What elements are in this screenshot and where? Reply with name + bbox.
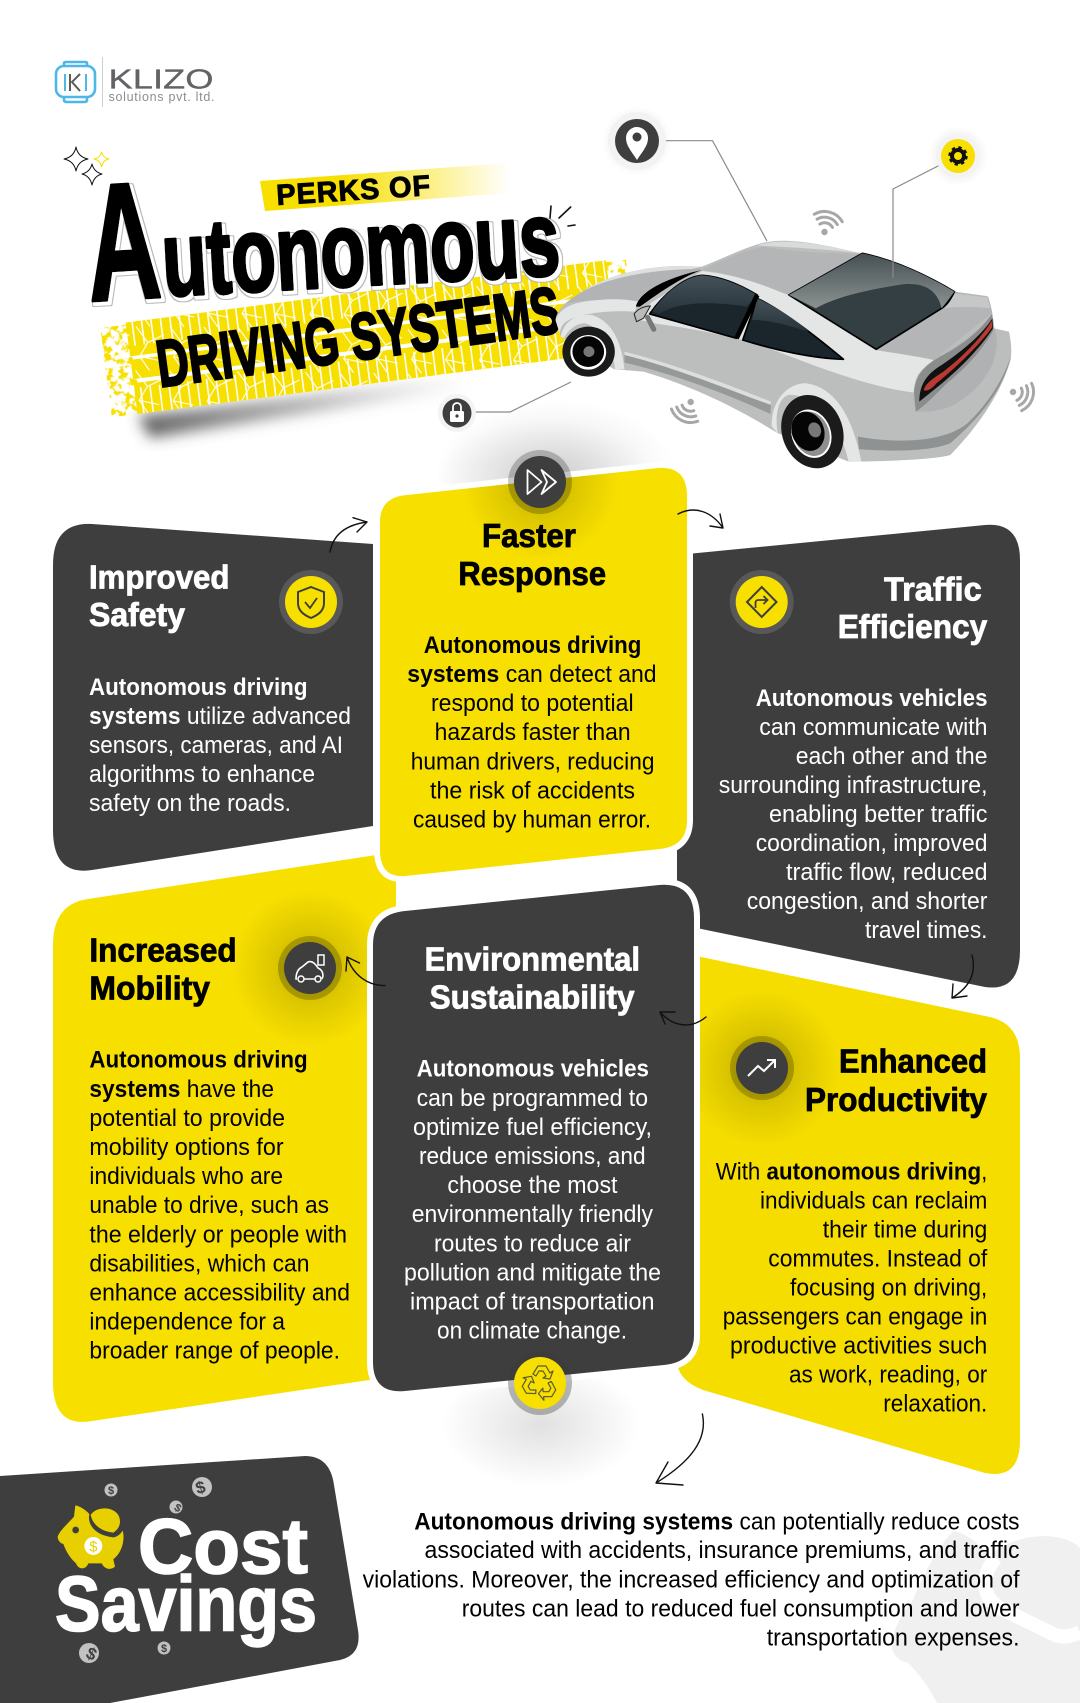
- body text: systems utilize advanced: [89, 703, 351, 730]
- arrow: productivity to environmental: [660, 1012, 706, 1025]
- body text: impact of transportation: [410, 1288, 654, 1316]
- car body: [556, 241, 1011, 462]
- body text: human drivers, reducing: [411, 748, 654, 775]
- heading: Efficiency: [838, 608, 988, 645]
- body text: hazards faster than: [435, 719, 631, 746]
- wifi signal: rear: [1005, 377, 1037, 413]
- body text: Autonomous vehicles: [417, 1056, 649, 1083]
- body text: routes to reduce air: [434, 1230, 631, 1257]
- callout: settings gear: [893, 126, 988, 278]
- body text: Autonomous driving: [89, 1047, 308, 1074]
- wing mirror: [634, 270, 702, 329]
- logo divider: [102, 57, 103, 107]
- background pig watermark: [892, 1531, 1080, 1703]
- body text: systems can detect and: [407, 661, 657, 688]
- body text: [89, 1047, 350, 1365]
- track shadow: [138, 376, 470, 438]
- heading: [89, 931, 237, 1007]
- heading: Traffic: [884, 570, 982, 608]
- ribbon label: PERKS OF: [275, 170, 431, 212]
- body text: optimize fuel efficiency,: [413, 1114, 652, 1141]
- heading: [55, 1502, 317, 1648]
- body text: the elderly or people with: [89, 1221, 347, 1248]
- body text: systems have the: [89, 1076, 274, 1103]
- body text: coordination, improved: [756, 830, 988, 857]
- panel: traffic efficiency: [677, 525, 1020, 988]
- body text: commutes. Instead of: [768, 1245, 987, 1272]
- body text: Autonomous driving: [424, 632, 641, 659]
- panel background: [380, 468, 687, 876]
- icon: road sign: [730, 570, 794, 634]
- emphasis burst: [550, 206, 575, 226]
- rear wheel: [772, 387, 853, 476]
- cost savings text: associated with accidents, insurance premiums, and traffic: [424, 1537, 1020, 1564]
- body text: respond to potential: [431, 690, 634, 717]
- icon shadow below panel: [441, 1363, 641, 1487]
- body text: Autonomous driving: [89, 674, 308, 701]
- body text: travel times.: [865, 917, 988, 944]
- logo wordmark: KLIZO: [108, 63, 214, 94]
- logo: [56, 57, 214, 107]
- track texture: [100, 258, 637, 417]
- logo icon: [56, 62, 95, 102]
- arrow: traffic to productivity: [952, 955, 973, 998]
- body text: Autonomous vehicles: [756, 685, 988, 712]
- arrow: response to traffic: [678, 510, 723, 528]
- icon: fast forward: [476, 450, 604, 546]
- title line: autonomous: A: [81, 148, 165, 337]
- heading: Safety: [89, 596, 186, 633]
- coins: $: [194, 1477, 208, 1498]
- body text: congestion, and shorter: [747, 888, 988, 915]
- heading: Improved: [89, 559, 230, 596]
- body text: independence for a: [89, 1309, 285, 1336]
- body text: individuals can reclaim: [760, 1187, 987, 1214]
- cost savings text: Autonomous driving systems can potentially reduce costs: [414, 1508, 1020, 1535]
- body text: broader range of people.: [89, 1338, 340, 1365]
- body text: [89, 674, 351, 817]
- cost savings text: transportation expenses.: [767, 1625, 1020, 1652]
- body text: reduce emissions, and: [419, 1143, 646, 1170]
- body text: choose the most: [447, 1172, 618, 1199]
- body text: productive activities such: [730, 1332, 987, 1359]
- panel: improved safety: [53, 524, 373, 871]
- body text: [719, 685, 988, 944]
- heading: [838, 570, 988, 645]
- ribbon: perks of: [260, 163, 510, 212]
- body text: individuals who are: [89, 1163, 283, 1190]
- heading: [805, 1043, 988, 1118]
- body text: pollution and mitigate the: [404, 1259, 661, 1286]
- soft shadow below the car: [435, 400, 675, 540]
- panel: environmental sustainability: [373, 885, 694, 1487]
- heading: Productivity: [805, 1081, 988, 1118]
- windows: [650, 253, 954, 359]
- panel: increased mobility: [53, 852, 396, 1422]
- panel background: [373, 885, 694, 1391]
- tyre track band: [100, 258, 637, 438]
- icon: recycle: [508, 1351, 572, 1415]
- icon: piggy bank: $: [89, 1539, 97, 1555]
- heading: Faster: [482, 517, 576, 554]
- body text: With autonomous driving,: [716, 1158, 987, 1185]
- callout: location pin: [602, 106, 767, 241]
- body text: each other and the: [796, 743, 988, 770]
- title line: autonomous: utonomous: [159, 180, 563, 319]
- body text: their time during: [823, 1216, 987, 1243]
- body text: [716, 1158, 987, 1417]
- panel: faster response: [380, 404, 687, 876]
- body text: can be programmed to: [417, 1085, 648, 1112]
- icon: electric car: [232, 890, 388, 1046]
- icon: shield: [279, 570, 343, 634]
- heading: [425, 940, 640, 1015]
- icon: trend arrow: [684, 990, 840, 1146]
- body text: focusing on driving,: [790, 1274, 987, 1301]
- body text: caused by human error.: [413, 806, 651, 834]
- title line: autonomous: [81, 148, 563, 337]
- heading: Cost: [138, 1502, 308, 1590]
- title line: driving systems: DRIVING SYSTEMS: [152, 272, 564, 401]
- panel background: [677, 525, 1020, 988]
- car illustration: [556, 241, 1011, 476]
- wifi signal: under car: [669, 393, 705, 427]
- heading: Savings: [55, 1560, 317, 1648]
- title: [81, 148, 575, 401]
- icon: piggy bank: [58, 1505, 124, 1569]
- icon glow above panel: [435, 420, 655, 540]
- heading: Enhanced: [839, 1043, 987, 1080]
- panel: enhanced productivity: [677, 952, 1020, 1474]
- coins: [79, 1477, 212, 1665]
- ribbon shape: [260, 163, 510, 211]
- body text: safety on the roads.: [89, 790, 291, 817]
- heading: Response: [458, 555, 606, 592]
- body text: enhance accessibility and: [89, 1280, 350, 1306]
- panel background: [53, 852, 396, 1422]
- body text: can communicate with: [759, 714, 988, 741]
- body text: passengers can engage in: [723, 1303, 987, 1330]
- body text: on climate change.: [437, 1318, 627, 1345]
- heading: Environmental: [425, 940, 640, 977]
- coins: $: [172, 1502, 183, 1515]
- body text: traffic flow, reduced: [786, 859, 988, 886]
- body text: enabling better traffic: [769, 801, 988, 828]
- body text: relaxation.: [883, 1390, 987, 1417]
- heading: [458, 517, 606, 592]
- callout: lock: [438, 382, 571, 432]
- arrow: environmental to mobility: [346, 957, 385, 986]
- heading: Sustainability: [430, 978, 635, 1015]
- coins: $: [83, 1643, 100, 1665]
- panel background: [53, 524, 373, 871]
- body text: [407, 632, 657, 834]
- coins: $: [161, 1643, 167, 1655]
- cost savings text: routes can lead to reduced fuel consumption and lower: [462, 1596, 1020, 1623]
- body text: algorithms to enhance: [89, 761, 315, 788]
- sparkles: [64, 147, 109, 185]
- body text: the risk of accidents: [430, 777, 635, 804]
- arrow: safety to response: [330, 518, 367, 552]
- heading: [89, 559, 230, 633]
- body text: environmentally friendly: [412, 1201, 654, 1228]
- front wheel: [562, 327, 615, 377]
- body text: as work, reading, or: [789, 1361, 987, 1388]
- cost savings text: violations. Moreover, the increased efficiency and optimization of: [363, 1567, 1020, 1594]
- arrow: productivity to cost savings: [656, 1414, 703, 1485]
- logo tagline: solutions pvt. ltd.: [108, 90, 214, 104]
- wifi signal: top: [810, 208, 844, 239]
- panel background: [0, 1456, 359, 1703]
- heading: Mobility: [89, 970, 211, 1007]
- body text: unable to drive, such as: [89, 1192, 329, 1219]
- body text: [404, 1056, 661, 1345]
- body text: mobility options for: [89, 1134, 284, 1161]
- tail light: [914, 314, 993, 412]
- body text: disabilities, which can: [89, 1250, 310, 1277]
- cost savings text: [363, 1508, 1020, 1652]
- body text: sensors, cameras, and AI: [89, 732, 343, 759]
- panel: cost savings: [0, 1456, 359, 1703]
- body text: potential to provide: [89, 1105, 285, 1132]
- heading: Increased: [89, 931, 237, 968]
- body text: surrounding infrastructure,: [719, 772, 988, 799]
- coins: $: [108, 1485, 114, 1497]
- panel background: [677, 952, 1020, 1474]
